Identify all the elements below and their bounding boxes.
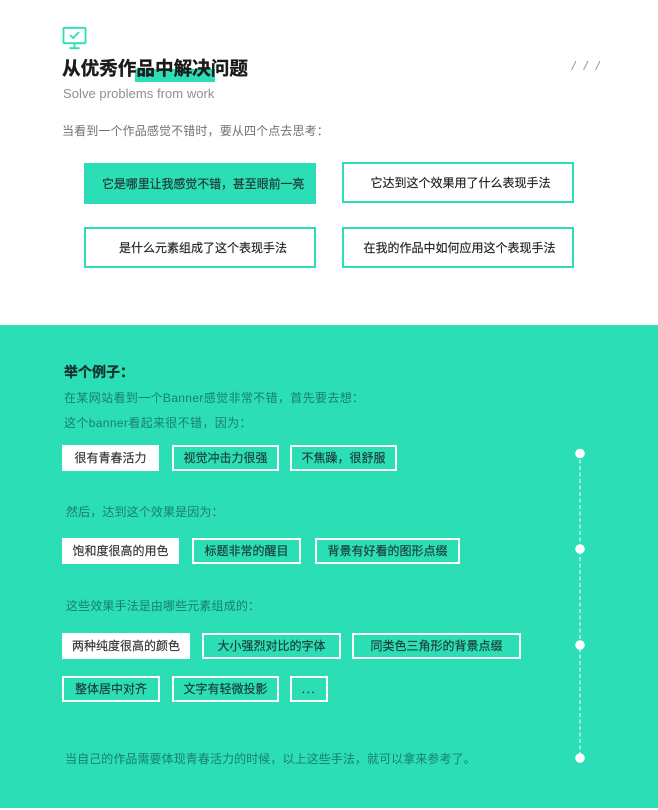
example heading: 举个例子： <box>64 364 134 380</box>
chip: ... <box>302 682 316 696</box>
chip <box>172 445 279 471</box>
chip <box>202 633 341 659</box>
chip <box>352 633 521 659</box>
chip: 文字有轻微投影 <box>183 682 268 696</box>
chip <box>62 676 160 702</box>
box: question 2 <box>342 162 574 203</box>
chip: 背景有好看的图形点缀 <box>327 544 448 558</box>
chip: 两种纯度很高的颜色 <box>72 639 180 653</box>
timeline <box>575 448 585 763</box>
chip <box>192 538 301 564</box>
chips row 4 <box>62 676 328 702</box>
box: question 3 <box>84 227 316 268</box>
box: question 4: 在我的作品中如何应用这个表现手法 <box>363 241 556 255</box>
chip: 不焦躁，很舒服 <box>301 451 386 465</box>
panel: example <box>0 325 658 808</box>
chip: 视觉冲击力很强 <box>183 451 268 465</box>
chip: 大小强烈对比的字体 <box>217 639 326 653</box>
chips row 2 <box>62 538 460 564</box>
chip: 标题非常的醒目 <box>204 544 288 558</box>
icon: monitor with check <box>62 26 86 50</box>
chip <box>290 445 397 471</box>
title: 从优秀作品中解决问题 <box>62 58 248 79</box>
chip <box>62 445 159 471</box>
intro text: 当看到一个作品感觉不错时，要从四个点去思考： <box>62 124 329 138</box>
chip: 饱和度很高的用色 <box>72 544 168 558</box>
decorative slashes <box>571 60 600 70</box>
chip: 同类色三角形的背景点缀 <box>370 639 502 653</box>
conclusion text: 当自己的作品需要体现青春活力的时候，以上这些手法，就可以拿来参考了。 <box>65 752 476 766</box>
box: question 4 <box>342 227 574 268</box>
chip <box>290 676 328 702</box>
chip <box>62 538 179 564</box>
chips row 3 <box>62 633 521 659</box>
box: question 3: 是什么元素组成了这个表现手法 <box>119 241 287 255</box>
chip <box>172 676 279 702</box>
box: question 1: 它是哪里让我感觉不错，甚至眼前一亮 <box>102 177 304 191</box>
line 1: 在某网站看到一个Banner感觉非常不错，首先要去想： <box>64 391 364 405</box>
chip: 很有青春活力 <box>74 451 146 465</box>
box: question 1 <box>84 163 316 204</box>
chip <box>315 538 460 564</box>
line 3: 然后，达到这个效果是因为： <box>66 505 224 519</box>
chip: 整体居中对齐 <box>75 682 147 696</box>
title highlight <box>135 69 215 82</box>
chip <box>62 633 190 659</box>
line 4: 这些效果手法是由哪些元素组成的： <box>66 599 260 613</box>
subtitle: Solve problems from work <box>63 86 214 100</box>
box: question 2: 它达到这个效果用了什么表现手法 <box>370 176 550 190</box>
chips row 1 <box>62 445 397 471</box>
line 2: 这个banner看起来很不错，因为： <box>64 416 252 430</box>
